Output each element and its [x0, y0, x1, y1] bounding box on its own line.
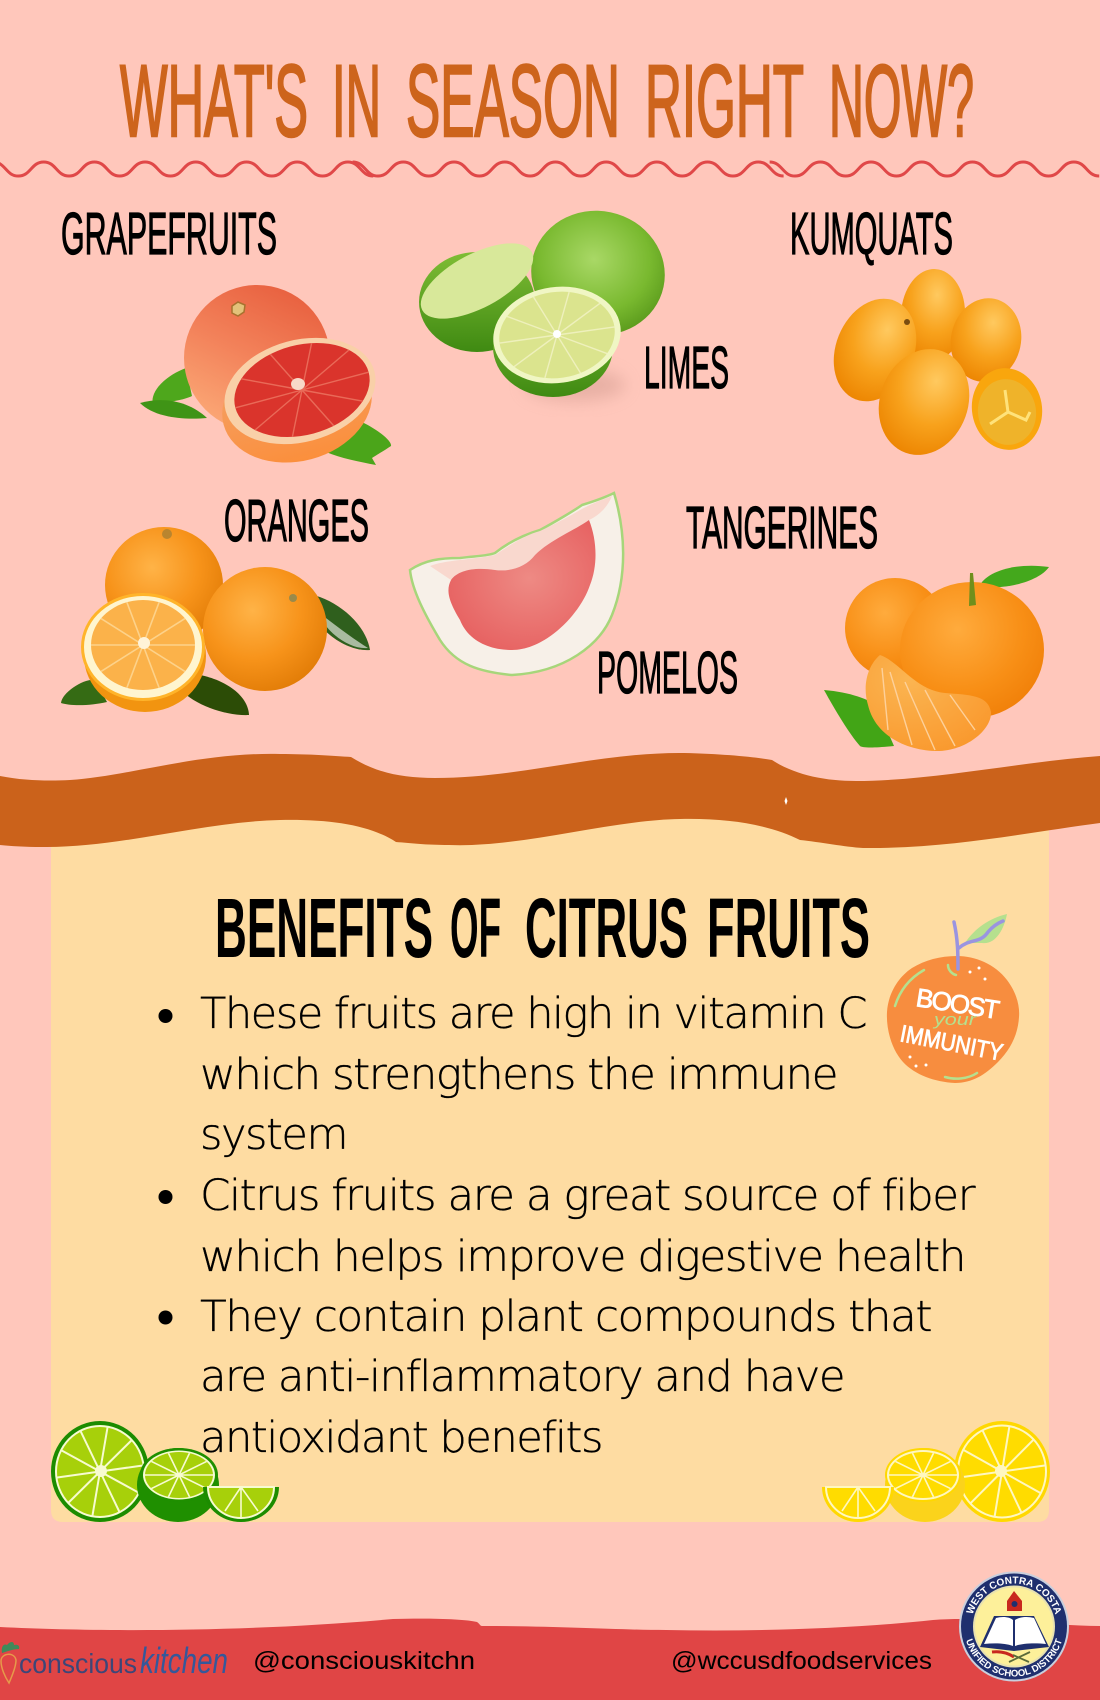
title: WHAT'S [120, 44, 308, 158]
handle: conscious kitchen: @consciouskitchn [253, 1647, 475, 1675]
labels [61, 201, 953, 706]
heading: benefits of citrus fruits: OF [450, 881, 501, 975]
fruit: pomelo [410, 493, 623, 675]
icon: boost your immunity orange: IMMUNITY [898, 1020, 1005, 1067]
wavy divider [0, 162, 1099, 176]
fruit: limes [410, 198, 676, 401]
heading: benefits of citrus fruits: BENEFITS [215, 881, 433, 975]
fruit: oranges [61, 527, 370, 715]
bullet 2 [158, 1171, 976, 1282]
icon: lime slices [50, 1421, 279, 1522]
heading: benefits of citrus fruits: CITRUS [525, 881, 688, 975]
bullet 3: are anti-inflammatory and have [200, 1352, 844, 1402]
bullet 1 [158, 989, 866, 1160]
labels: ORANGES [224, 488, 369, 554]
seal: west contra costa unified school district [959, 1572, 1069, 1682]
labels: LIMES [644, 335, 729, 401]
seal: west contra costa unified school district: UNIFIED SCHOOL DISTRICT [966, 1638, 1062, 1676]
heading: benefits of citrus fruits [215, 881, 870, 975]
title [120, 44, 974, 158]
icon: boost your immunity orange: BOOST [914, 982, 1002, 1025]
heading: benefits of citrus fruits: FRUITS [707, 881, 870, 975]
bullet 2: which helps improve digestive health [200, 1232, 965, 1282]
bullet 3: antioxidant benefits [200, 1413, 602, 1463]
title: SEASON [406, 44, 620, 158]
logo: conscious kitchen: conscious [19, 1648, 137, 1679]
icon: lemon slices [822, 1421, 1052, 1522]
footer band [0, 1619, 1100, 1700]
bullet 2: Citrus fruits are a great source of fiber [200, 1171, 976, 1221]
logo: conscious kitchen [1, 1640, 228, 1683]
label: grapefruits: GRAPEFRUITS [61, 201, 277, 267]
fruit: tangerines [824, 566, 1049, 751]
title: RIGHT [645, 44, 804, 158]
logo: conscious kitchen: kitchen [140, 1640, 228, 1681]
fruit: kumquats [819, 267, 1049, 468]
benefit bullet list [158, 989, 976, 1463]
orange wavy band [0, 753, 1100, 848]
seal: west contra costa unified school district: WEST CONTRA COSTA [966, 1576, 1061, 1614]
panel: benefits background [51, 810, 1049, 1522]
bullet 3 [158, 1292, 931, 1463]
label: tangerines: TANGERINES [686, 495, 878, 561]
bullet 1: system [200, 1110, 347, 1160]
title: IN [332, 44, 381, 158]
bullet 1: which strengthens the immune [200, 1050, 837, 1100]
labels: POMELOS [597, 640, 738, 706]
small highlight speck [784, 797, 788, 805]
fruit: grapefruit [140, 285, 391, 479]
bullet 3: They contain plant compounds that [200, 1292, 931, 1342]
handle: wccusd food services: @wccusdfoodservices [671, 1647, 932, 1675]
icon: boost your immunity orange [887, 914, 1019, 1083]
icon: boost your immunity orange: your [933, 1010, 978, 1029]
bullet 1: These fruits are high in vitamin C [200, 989, 866, 1039]
